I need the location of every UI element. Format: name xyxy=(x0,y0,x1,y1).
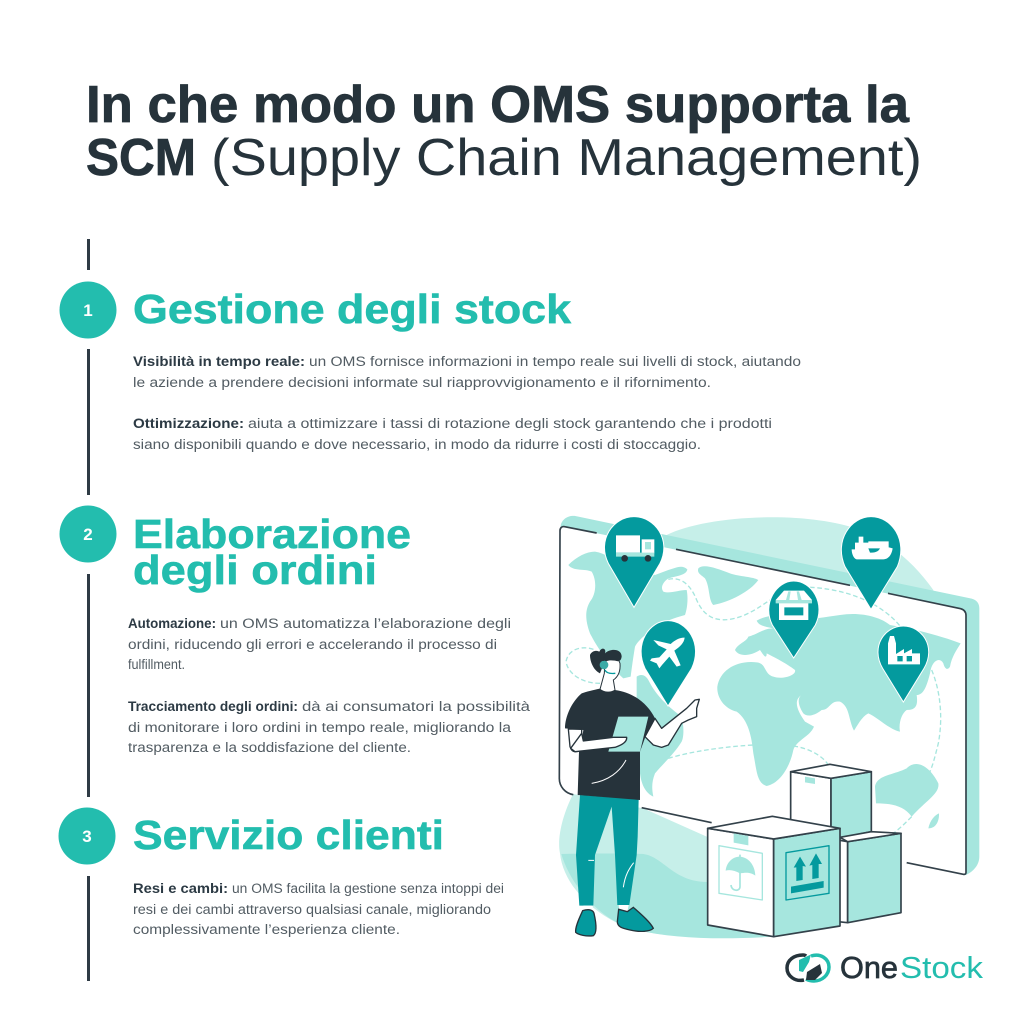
step 2 text: Automazione: xyxy=(128,616,216,631)
headset xyxy=(600,652,615,673)
title: (Supply Chain Management) xyxy=(211,129,922,187)
pointing arm xyxy=(645,699,699,747)
knee highlights xyxy=(588,860,634,887)
pin: airplane xyxy=(641,621,696,706)
step 1 text: un OMS fornisce informazioni in tempo reale sui livelli di stock, aiutando xyxy=(309,354,801,369)
front box xyxy=(708,816,840,937)
boxes xyxy=(708,764,901,937)
pin: factory xyxy=(878,626,929,702)
logo: OneStock: Stock xyxy=(900,950,984,985)
person xyxy=(565,649,699,936)
shirt xyxy=(565,689,655,800)
umbrella label xyxy=(719,846,762,900)
step 1 text: Visibilità in tempo reale: xyxy=(133,354,305,369)
arrows label xyxy=(786,846,829,900)
step 3 text: resi e dei cambi attraverso qualsiasi canale, migliorando xyxy=(133,902,491,917)
step 2 heading: Elaborazione xyxy=(133,511,411,557)
title: In che modo un OMS supporta la xyxy=(86,76,910,134)
step 2 text xyxy=(128,616,531,755)
legs xyxy=(576,795,639,906)
logo icon xyxy=(787,954,829,981)
back right box xyxy=(838,832,901,923)
socks xyxy=(583,905,629,912)
step 1 badge xyxy=(60,282,116,338)
route lines xyxy=(566,579,941,833)
step 1 heading: Gestione degli stock xyxy=(133,286,571,332)
step 2 text: dà ai consumatori la possibilità xyxy=(302,699,531,714)
hand xyxy=(571,733,627,752)
continents xyxy=(568,552,961,828)
neck and head xyxy=(600,658,620,692)
pin: ship xyxy=(841,517,901,609)
step 2 text: di monitorare i loro ordini in tempo reale, migliorando la xyxy=(128,720,512,735)
step 1 text: Ottimizzazione: xyxy=(133,416,244,431)
title xyxy=(86,76,922,187)
step 2 text: un OMS automatizza l’elaborazione degli xyxy=(220,616,511,631)
step 2 badge xyxy=(60,506,116,562)
hair xyxy=(590,649,622,673)
step 3 badge xyxy=(58,808,116,864)
step 3 badge: 3 xyxy=(82,827,92,846)
step 1 badge: 1 xyxy=(83,301,93,320)
step 3 text: Resi e cambi: xyxy=(133,881,228,896)
title: SCM xyxy=(86,129,196,187)
map board xyxy=(559,516,979,875)
step 2 text: trasparenza e la soddisfazione del cliente. xyxy=(128,740,411,755)
step 2 text: fulfillment. xyxy=(128,657,185,672)
illustration: world map logistics xyxy=(559,516,979,938)
holding arm xyxy=(568,729,582,752)
step 2 badge: 2 xyxy=(83,525,93,544)
step 2 heading: degli ordini xyxy=(133,547,377,593)
step 1 text: aiuta a ottimizzare i tassi di rotazione degli stock garantendo che i prodotti xyxy=(248,416,772,431)
step 1 text xyxy=(133,354,801,452)
step 1 text: le aziende a prendere decisioni informate sul riapprovvigionamento e il rifornimento. xyxy=(133,375,711,390)
step 3 text xyxy=(133,881,504,937)
tablet xyxy=(608,717,648,752)
shoes xyxy=(576,910,596,936)
step 2 text: Tracciamento degli ordini: xyxy=(128,699,298,714)
timeline xyxy=(87,239,90,981)
step 3 text: un OMS facilita la gestione senza intoppi dei xyxy=(232,881,504,896)
step 2 heading xyxy=(133,511,411,593)
step 3 text: complessivamente l’esperienza cliente. xyxy=(133,922,400,937)
logo: OneStock: One xyxy=(840,950,898,985)
step 1 text: siano disponibili quando e dove necessario, in modo da ridurre i costi di stoccaggio. xyxy=(133,437,701,452)
back top box xyxy=(791,764,871,840)
step 3 heading: Servizio clienti xyxy=(133,812,444,858)
logo: OneStock xyxy=(787,950,984,985)
pin: store xyxy=(769,581,819,658)
pin: truck xyxy=(604,517,664,607)
background blob xyxy=(559,517,933,937)
step 2 text: ordini, riducendo gli errori e accelerando il processo di xyxy=(128,637,497,652)
